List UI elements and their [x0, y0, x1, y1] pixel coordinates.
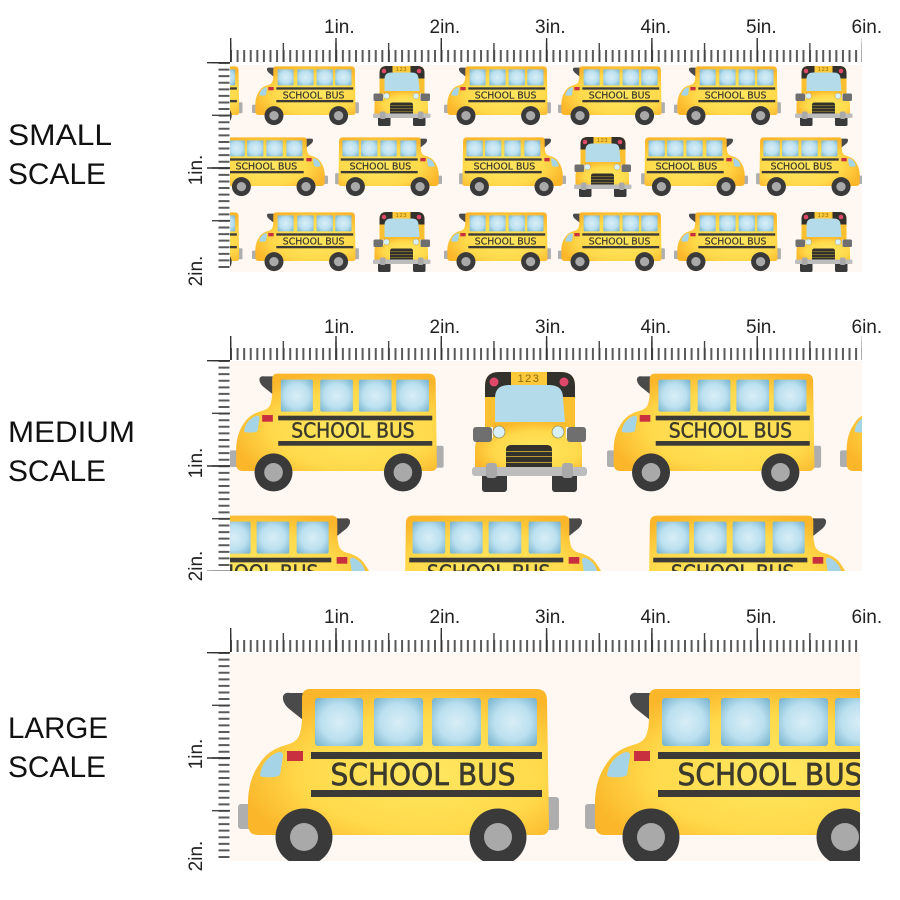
label: small scale: [8, 119, 112, 191]
ruler: medium scale: 5in.: [746, 317, 777, 338]
ruler: medium scale: 2in.: [430, 317, 460, 338]
label: large scale: SCALE: [8, 751, 106, 784]
panel: small scale pattern: SCHOOL BUS: [705, 90, 766, 101]
panel: small scale pattern: SCHOOL BUS: [166, 90, 228, 101]
panel: large scale pattern: [230, 653, 900, 866]
ruler: small scale: 2in.: [186, 256, 207, 286]
panel: medium scale pattern: [230, 361, 862, 571]
panel: small scale pattern: 123: [818, 213, 829, 219]
label: small scale: SCALE: [8, 158, 106, 191]
ruler: medium scale: 1in.: [324, 317, 355, 338]
panel: small scale pattern: SCHOOL BUS: [589, 90, 650, 101]
ruler: medium scale: 3in.: [535, 317, 566, 338]
panel: medium scale pattern: SCHOOL BUS: [291, 419, 415, 443]
ruler: medium scale: [186, 317, 882, 581]
panel: medium scale pattern: SCHOOL BUS: [671, 561, 794, 585]
ruler: medium scale: 4in.: [640, 317, 671, 338]
panel: small scale pattern: [230, 65, 862, 272]
ruler: small scale: 3in.: [535, 17, 566, 38]
panel: small scale pattern: SCHOOL BUS: [350, 161, 411, 172]
ruler: small scale: 1in.: [186, 155, 207, 185]
panel: small scale pattern: SCHOOL BUS: [166, 236, 228, 247]
ruler: small scale: 5in.: [746, 17, 777, 38]
panel: small scale pattern: 123: [597, 138, 608, 144]
ruler: small scale: 4in.: [640, 17, 671, 38]
panel: small scale pattern: SCHOOL BUS: [475, 236, 536, 247]
ruler: small scale: 1in.: [324, 17, 355, 38]
panel: small scale pattern: 123: [396, 67, 407, 73]
ruler: large scale: 1in.: [324, 607, 355, 628]
panel: small scale pattern: 123: [396, 213, 407, 219]
ruler: small scale: 2in.: [430, 17, 460, 38]
panel: medium scale pattern: SCHOOL BUS: [427, 561, 550, 585]
panel: medium scale pattern: SCHOOL BUS: [669, 419, 792, 443]
label: medium scale: MEDIUM: [8, 416, 135, 449]
ruler: large scale: 6in.: [852, 607, 882, 628]
panel: small scale pattern: SCHOOL BUS: [236, 161, 297, 172]
ruler: medium scale: 1in.: [186, 448, 207, 478]
ruler: large scale: 2in.: [430, 607, 460, 628]
ruler: large scale: 3in.: [535, 607, 566, 628]
panel: small scale pattern: SCHOOL BUS: [283, 90, 344, 101]
panel: large scale pattern: SCHOOL BUS: [330, 758, 516, 793]
panel: small scale pattern: SCHOOL BUS: [771, 161, 832, 172]
panel: medium scale pattern: 123: [518, 373, 540, 385]
panel: small scale pattern: SCHOOL BUS: [283, 236, 344, 247]
ruler: large scale: 2in.: [186, 841, 207, 871]
ruler: small scale: [186, 17, 882, 286]
panel: small scale pattern: 123: [818, 67, 829, 73]
label: large scale: LARGE: [8, 712, 108, 745]
panel: medium scale pattern: SCHOOL BUS: [195, 561, 318, 585]
ruler: large scale: 1in.: [186, 739, 207, 769]
ruler: medium scale: 6in.: [852, 317, 882, 338]
label: large scale: [8, 712, 108, 784]
ruler: medium scale: 2in.: [186, 551, 207, 581]
label: small scale: SMALL: [8, 119, 112, 152]
panel: small scale pattern: SCHOOL BUS: [475, 90, 536, 101]
label: medium scale: [8, 416, 135, 488]
panel: small scale pattern: SCHOOL BUS: [589, 236, 650, 247]
label: medium scale: SCALE: [8, 455, 106, 488]
ruler: small scale: 6in.: [852, 17, 882, 38]
panel: small scale pattern: SCHOOL BUS: [474, 161, 535, 172]
panel: small scale pattern: SCHOOL BUS: [705, 236, 766, 247]
panel: large scale pattern: SCHOOL BUS: [678, 758, 862, 793]
panel: small scale pattern: SCHOOL BUS: [656, 161, 717, 172]
ruler: large scale: 5in.: [746, 607, 777, 628]
ruler: large scale: [186, 607, 882, 871]
ruler: large scale: 4in.: [640, 607, 671, 628]
